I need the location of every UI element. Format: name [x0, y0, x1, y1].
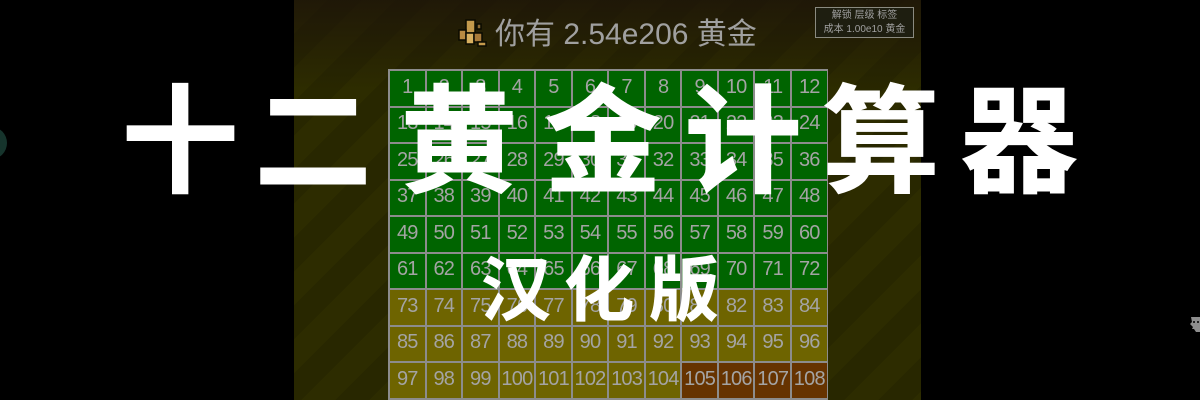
number grid: 25: [397, 149, 418, 171]
number grid: 90: [580, 331, 600, 353]
number grid: 27: [470, 149, 491, 171]
number grid: 48: [799, 185, 820, 207]
number grid: 24: [799, 112, 820, 134]
number grid: 6: [585, 76, 595, 98]
icon: gold coin stacks: [458, 19, 487, 47]
number grid: 102: [575, 368, 606, 390]
left edge teal circle: [0, 127, 7, 159]
number grid: 58: [726, 222, 747, 244]
number grid: 20: [653, 112, 673, 134]
number grid: 1: [402, 76, 412, 98]
main title: 黄: [400, 77, 518, 208]
number grid: 100: [501, 368, 532, 390]
number grid: 32: [653, 149, 673, 171]
gold amount heading: 你有 2.54e206 黄金: [495, 18, 757, 51]
unlock tier labels button: 成本 1.00e10 黄金: [824, 24, 905, 35]
number grid: 105: [684, 368, 715, 390]
number grid: 64: [507, 258, 527, 280]
number grid: 44: [653, 185, 673, 207]
number grid: 51: [470, 222, 491, 244]
number grid: 82: [726, 295, 747, 317]
number grid: 23: [762, 112, 783, 134]
number grid: 4: [512, 76, 522, 98]
number grid: 62: [433, 258, 454, 280]
number grid: 50: [433, 222, 454, 244]
number grid: 96: [799, 331, 820, 353]
game panel background: [294, 0, 921, 400]
number grid: 93: [689, 331, 710, 353]
number grid: 52: [507, 222, 527, 244]
number grid: 99: [470, 368, 491, 390]
number grid: 78: [580, 295, 600, 317]
number grid: 94: [726, 331, 747, 353]
number grid: 15: [470, 112, 491, 134]
number grid: 2: [439, 76, 449, 98]
number grid: 33: [689, 149, 710, 171]
number grid: 18: [580, 112, 600, 134]
number grid: 107: [757, 368, 788, 390]
number grid: 92: [653, 331, 673, 353]
number grid: 86: [433, 331, 454, 353]
number grid: 79: [616, 295, 637, 317]
number grid: 34: [726, 149, 747, 171]
main title: 算: [822, 77, 940, 208]
number grid: 40: [507, 185, 527, 207]
number grid: 74: [433, 295, 454, 317]
number grid: 55: [616, 222, 637, 244]
number grid: 36: [799, 149, 820, 171]
number grid: 7: [621, 76, 632, 98]
number grid: 38: [433, 185, 454, 207]
number grid: 77: [543, 295, 564, 317]
main title: 器: [960, 77, 1078, 208]
number grid: 63: [470, 258, 491, 280]
number grid: 11: [763, 76, 782, 98]
number grid: 29: [543, 149, 564, 171]
number grid: 47: [762, 185, 783, 207]
number grid: 89: [543, 331, 564, 353]
number grid: 9: [694, 76, 705, 98]
main title: 十: [121, 77, 238, 208]
subtitle: [480, 252, 720, 331]
number grid: 88: [507, 331, 527, 353]
number grid: 83: [762, 295, 783, 317]
number grid: 35: [762, 149, 783, 171]
right edge cat icon: [1190, 317, 1200, 332]
number grid: 45: [689, 185, 710, 207]
subtitle: 汉: [480, 252, 552, 331]
number grid: 72: [799, 258, 820, 280]
number grid: 68: [653, 258, 673, 280]
number grid: 56: [653, 222, 673, 244]
number grid: 37: [397, 185, 418, 207]
number grid: 76: [507, 295, 527, 317]
number grid: 97: [397, 368, 418, 390]
number grid: 61: [397, 258, 418, 280]
number grid: 80: [653, 295, 673, 317]
number grid: 43: [616, 185, 637, 207]
number grid: 22: [726, 112, 747, 134]
number grid: 21: [689, 112, 710, 134]
number grid: 98: [433, 368, 454, 390]
number grid: 46: [726, 185, 747, 207]
number grid: 53: [543, 222, 564, 244]
number grid: 71: [762, 258, 783, 280]
number grid: 5: [548, 76, 559, 98]
number grid: 14: [433, 112, 454, 134]
number grid: 49: [397, 222, 418, 244]
number grid: 104: [648, 368, 679, 390]
number grid: 69: [689, 258, 710, 280]
number grid: 39: [470, 185, 491, 207]
number grid: 13: [397, 112, 418, 134]
subtitle: 版: [648, 252, 720, 331]
number grid: 101: [538, 368, 569, 390]
number grid: 12: [799, 76, 820, 98]
number grid: 91: [616, 331, 637, 353]
number grid: 87: [470, 331, 491, 353]
number grid: 16: [507, 112, 527, 134]
number grid: 108: [794, 368, 825, 390]
number grid: 85: [397, 331, 418, 353]
number grid: 59: [762, 222, 783, 244]
number grid: 73: [397, 295, 418, 317]
number grid: 103: [611, 368, 642, 390]
number grid: 54: [580, 222, 600, 244]
number grid: 17: [543, 112, 564, 134]
main title: [121, 77, 1078, 208]
number grid: 31: [616, 149, 637, 171]
number grid: 66: [580, 258, 600, 280]
number grid: 67: [616, 258, 637, 280]
number grid: 106: [721, 368, 752, 390]
number grid: 42: [580, 185, 600, 207]
number grid: 57: [689, 222, 710, 244]
number grid: 30: [580, 149, 600, 171]
unlock tier labels button: 解锁 层级 标签: [832, 10, 897, 21]
number grid: 81: [689, 295, 710, 317]
number grid: 10: [726, 76, 747, 98]
number grid: 3: [475, 76, 486, 98]
main title: 金: [544, 77, 662, 208]
number grid: 75: [470, 295, 491, 317]
number grid: 8: [658, 76, 668, 98]
number grid: [388, 69, 828, 400]
main title: 计: [684, 77, 802, 208]
number grid: 41: [543, 185, 564, 207]
subtitle: 化: [563, 252, 634, 331]
number grid: 28: [507, 149, 527, 171]
number grid: 95: [762, 331, 783, 353]
number grid: 19: [616, 112, 637, 134]
main title: 二: [254, 77, 372, 208]
number grid: 26: [433, 149, 454, 171]
number grid: 60: [799, 222, 820, 244]
number grid: 65: [543, 258, 564, 280]
unlock tier labels button: [815, 7, 914, 38]
number grid: 84: [799, 295, 820, 317]
number grid: 70: [726, 258, 747, 280]
